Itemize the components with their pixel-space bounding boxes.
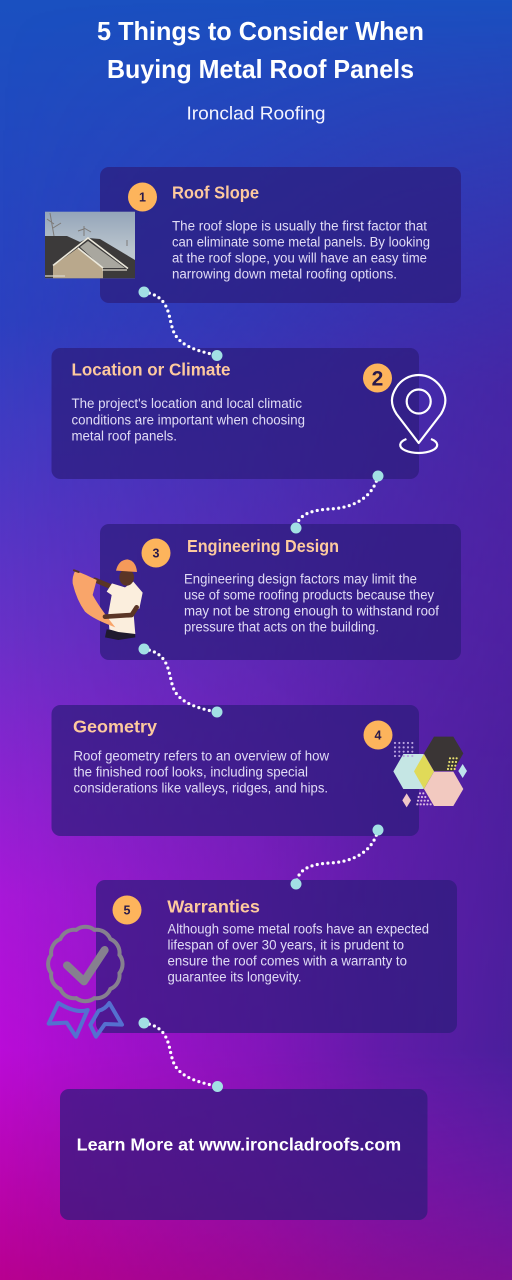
text: engineering body [184,571,439,634]
text: engineering body: use of some roofing products because they [184,587,434,602]
connector 1 [138,286,222,361]
panel: engineering design [100,524,461,660]
number badge 5: 5 [124,904,131,918]
text: call to action: Learn More at www.ironcladroofs.com [77,1135,401,1155]
text: warranties body: Although some metal roofs have an expected [168,921,429,936]
number badge 1: 1 [139,190,146,204]
heading: geometry: Geometry [73,717,157,737]
panel: learn more [60,1089,428,1220]
subtitle: Ironclad Roofing [186,104,326,124]
number badge 5 [112,896,142,924]
icon: location pin [392,375,445,453]
heading: roof slope: Roof Slope [172,182,259,202]
title [97,16,424,84]
number badge 3: 3 [153,546,160,560]
number badge 3 [142,538,170,568]
text: roof slope body [172,218,430,282]
title: Buying Metal Roof Panels [107,54,414,84]
heading: location or climate: Location or Climate [72,360,231,380]
number badge 2: 2 [372,368,383,390]
text: geometry body: considerations like valleys, ridges, and hips. [74,780,328,795]
text: warranties body: guarantee its longevity. [168,969,302,984]
panel: roof slope [100,167,461,303]
panel: warranties [96,880,457,1033]
text: engineering body: Engineering design factors may limit the [184,571,417,586]
text: roof slope body: narrowing down metal roofing options. [172,266,397,282]
heading: engineering design: Engineering Design [187,536,339,556]
text: warranties body: lifespan of over 30 years, it is prudent to [168,937,404,952]
text: warranties body [168,921,429,984]
text: roof slope body: at the roof slope, you will have an easy time [172,250,427,266]
icon: worker holding plans [73,559,143,640]
text: engineering body: may not be strong enough to withstand roof [184,603,439,618]
text: roof slope body: can eliminate some metal panels. By looking [172,234,430,250]
text: roof slope body: The roof slope is usually the first factor that [172,218,427,234]
photo: house roof [45,212,135,278]
number badge 1 [128,182,157,212]
connector 2 [290,470,384,534]
text: geometry body [74,749,329,795]
heading: warranties: Warranties [167,897,260,917]
text: location body: The project's location and local climatic [72,396,302,411]
text: location body: conditions are important when choosing [72,412,305,428]
number badge 2 [363,364,392,392]
connector 4 [290,824,384,890]
text: geometry body: Roof geometry refers to an overview of how [74,749,329,764]
number badge 4 [364,720,392,750]
icon: hexagons [393,737,467,807]
connector 3 [138,644,222,718]
panel: location or climate [52,348,419,479]
text: location body: metal roof panels. [72,428,177,444]
connector 5 [138,1018,223,1092]
text: location body [72,396,305,444]
panel: geometry [52,705,419,836]
number badge 4: 4 [375,728,382,742]
text: engineering body: pressure that acts on the building. [184,619,379,634]
icon: warranty seal [48,927,123,1037]
title: 5 Things to Consider When [97,16,424,46]
text: warranties body: ensure the roof comes with a warranty to [168,953,407,968]
text: geometry body: the finished roof looks, including special [74,765,308,780]
